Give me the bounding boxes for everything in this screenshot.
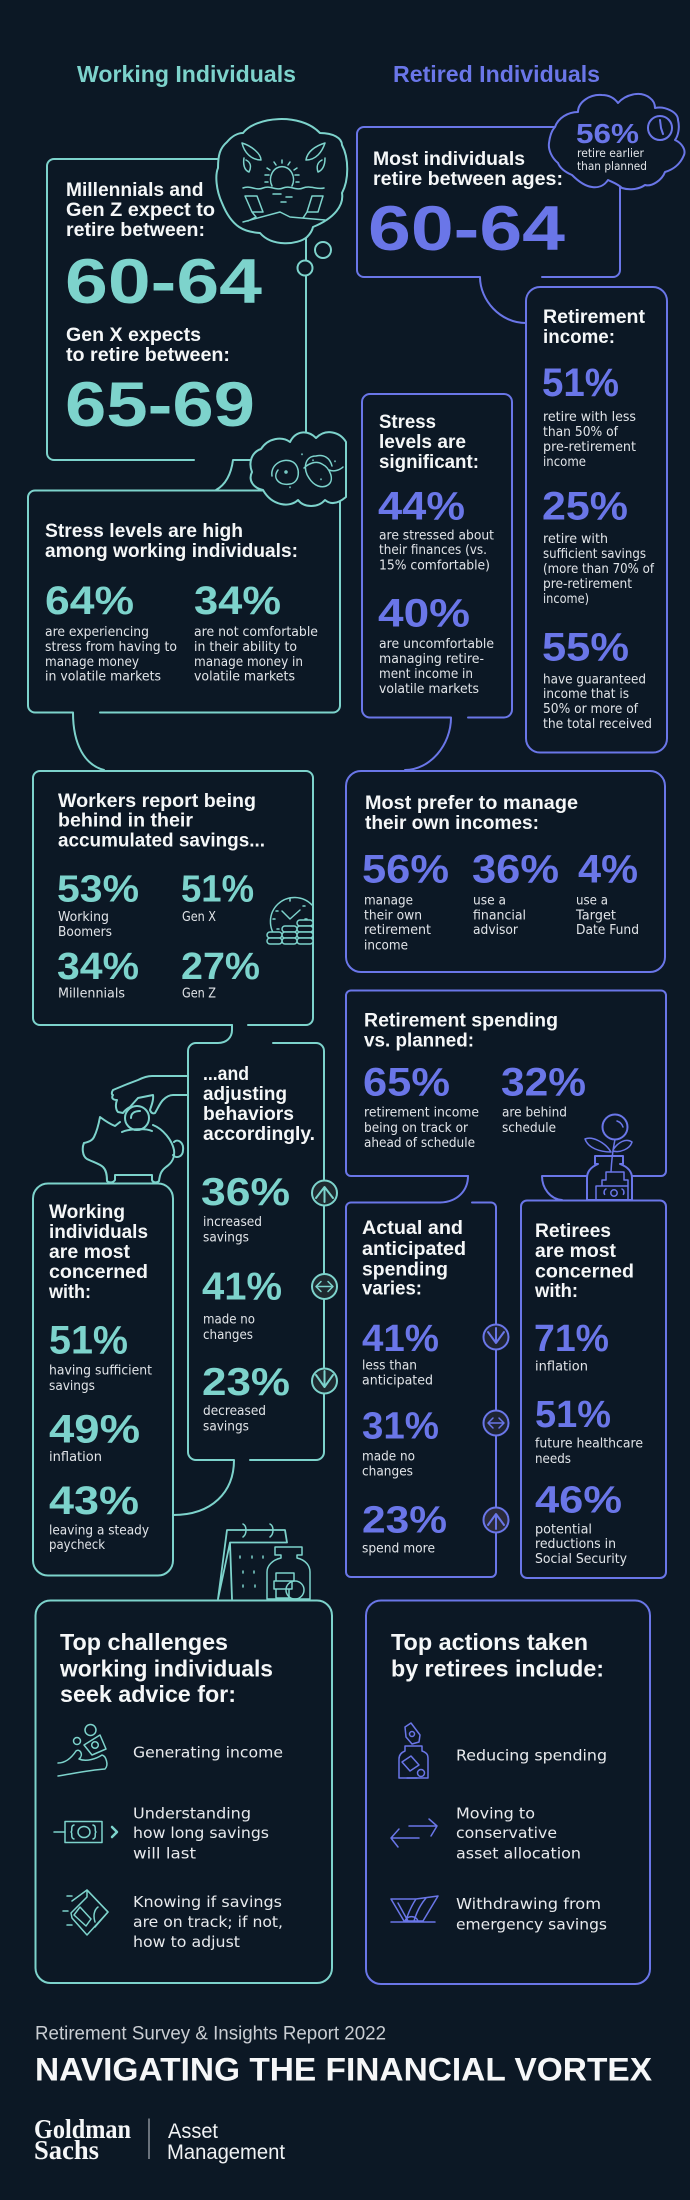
heading: top actions: Top actions taken (391, 1629, 588, 1655)
stat: 25%: retire with (543, 531, 608, 547)
stat: 36% advisor: 36% (472, 848, 559, 892)
stat: 44%: their finances (vs. (379, 542, 487, 558)
stat: 34%: 34% (194, 579, 281, 623)
stat: 44%: are stressed about (379, 528, 494, 544)
heading: spending varies: spending (362, 1258, 448, 1280)
text: moving to conservative: conservative (456, 1824, 557, 1842)
stat: 36% increased (201, 1171, 290, 1246)
text: understanding how long savings: will last (133, 1844, 196, 1862)
heading: spending varies (362, 1217, 466, 1300)
logo: Goldman Sachs Asset Management: Goldman (34, 2114, 131, 2144)
icon: scribble cloud (250, 432, 346, 506)
stat: 40%: managing retire- (379, 651, 484, 667)
panel: working stress levels (28, 490, 340, 770)
stat: 53%: 53% (57, 868, 139, 910)
stat: 71% inflation: 71% (534, 1318, 609, 1360)
panel: retirement income (526, 287, 667, 752)
logo: Goldman Sachs Asset Management: Sachs (34, 2135, 99, 2165)
stat: 64%: are experiencing (45, 624, 149, 640)
stat: 71% inflation: inflation (535, 1358, 588, 1374)
heading: stress significant: Stress (379, 411, 436, 433)
heading: workers report: accumulated savings... (58, 830, 265, 852)
stat: 65% on track: 65% (363, 1060, 450, 1104)
stat: 65% on track: retirement income (364, 1104, 479, 1120)
panel: retired stress (362, 394, 512, 770)
panel: workers behind in savings (33, 771, 313, 1025)
stat: 25%: (more than 70% of (543, 561, 655, 577)
stat: 51% savings: 51% (49, 1318, 128, 1362)
heading: stress levels high (45, 520, 298, 562)
icon: down arrow (484, 1324, 508, 1350)
stat: 51%: income (543, 454, 586, 470)
panel: actual and anticipated spending (346, 1176, 508, 1577)
stat: 4% target date: 4% (578, 848, 638, 892)
stat: 25%: income) (543, 591, 589, 607)
heading: most concerned (48, 1201, 148, 1303)
stat: 31% no changes: made no (362, 1448, 415, 1464)
heading: stress significant (379, 411, 479, 473)
stat: 51% savings: having sufficient (49, 1362, 152, 1378)
text: Gen X expects: Gen X expects (66, 324, 201, 346)
logo: Goldman Sachs Asset Management: Asset (168, 2120, 218, 2143)
heading: retirees concerned: concerned (535, 1260, 634, 1282)
stat: 36% increased: increased (203, 1214, 262, 1230)
stat: 51%: than 50% of (543, 424, 619, 440)
number: 65-69: 65-69 (65, 370, 255, 440)
icon: bill with arrow (54, 1822, 117, 1842)
heading: stress significant: significant: (379, 451, 479, 473)
heading: prefer to manage: their own incomes: (365, 812, 539, 834)
stat: 43% paycheck: leaving a steady (49, 1522, 149, 1538)
stat: 51% healthcare: needs (535, 1451, 571, 1467)
text: retire earlier than planned (577, 146, 647, 173)
stat: 46% social security: potential (535, 1522, 592, 1538)
icon: hand with money (58, 1724, 107, 1776)
text: Most individuals: Most individuals (373, 148, 525, 170)
stat: 44%: 15% comfortable) (379, 558, 490, 574)
stat: 34%: manage money in (194, 654, 303, 670)
icon: calendar and jar (218, 1524, 310, 1599)
panel: adjusting behaviors (173, 1025, 337, 1515)
stat: 25% (542, 484, 655, 607)
logo: Goldman Sachs Asset Management: Management (167, 2141, 285, 2164)
stat: 44% (378, 484, 494, 574)
heading: adjusting behaviors: ...and (203, 1063, 249, 1085)
stat: 25%: pre-retirement (543, 576, 632, 592)
stat: 36% advisor: advisor (473, 922, 518, 938)
stat: 51% savings (49, 1318, 152, 1394)
stat: 56% manage: 56% (362, 848, 449, 892)
icon: sideways arrow (312, 1274, 337, 1299)
icon: clock (648, 116, 672, 140)
stat: 40%: are uncomfortable (379, 636, 494, 652)
stat: 55%: income that is (543, 686, 629, 702)
heading: workers report: Workers report being (58, 790, 256, 812)
stat: 41% less: 41% (362, 1318, 439, 1360)
stat: 36% increased: 36% (201, 1171, 290, 1214)
text: retire earlier than planned: retire earlier (577, 146, 644, 160)
stat: 34% Millennials: Millennials (58, 986, 125, 1002)
stat: 31% no changes: 31% (362, 1406, 439, 1448)
heading: top actions: by retirees include: (391, 1656, 604, 1682)
stat: 36% increased: savings (203, 1230, 249, 1246)
icon: hand with coin and piggy bank (83, 1076, 188, 1182)
stat: 51%: retire with less (543, 409, 636, 425)
stat: 56%: 56% (576, 118, 639, 149)
heading: top actions (391, 1629, 604, 1682)
stat: 51%: pre-retirement (543, 439, 636, 455)
heading: retirement income: income: (543, 326, 615, 348)
panel: working retirement age (47, 159, 306, 490)
stat: 31% no changes (362, 1406, 439, 1480)
stat: 32% behind: 32% (501, 1060, 586, 1104)
icon: sideways arrow (484, 1410, 508, 1436)
text: withdrawing: Withdrawing from (456, 1895, 601, 1913)
stat: 56% manage: manage (364, 892, 413, 908)
stat: 64% (45, 579, 177, 684)
stat: 56% manage: their own (364, 908, 422, 924)
heading: retirement income (543, 306, 645, 348)
text: Millennials and Gen Z: Millennials and (66, 179, 204, 201)
text: Most individuals (373, 148, 563, 190)
stat: 40%: volatile markets (379, 681, 479, 697)
icon: down arrow (312, 1368, 337, 1394)
heading: most concerned: Working (49, 1201, 125, 1223)
stat: 23% decreased: savings (203, 1418, 249, 1434)
heading: adjusting behaviors: adjusting (203, 1083, 287, 1105)
stat: 46% social security: Social Security (535, 1551, 627, 1567)
text: moving to conservative: asset allocation (456, 1844, 581, 1862)
stat: 41% no change: 41% (202, 1266, 282, 1308)
heading: most concerned: are most (49, 1241, 130, 1263)
heading: spending vs planned (364, 1010, 558, 1052)
stat: 23% more (362, 1500, 447, 1556)
heading: retirees concerned (534, 1220, 634, 1302)
stat: 43% paycheck (49, 1479, 149, 1553)
stat: 41% no change: made no (203, 1312, 255, 1328)
text: understanding how long savings: how long savings (133, 1824, 269, 1842)
stat: 36% advisor (472, 848, 559, 938)
heading: prefer to manage (365, 792, 578, 834)
stat: 32% behind: schedule (502, 1120, 556, 1136)
heading: spending vs planned: vs. planned: (364, 1030, 474, 1052)
stat: 34%: in their ability to (194, 639, 297, 655)
icon: jar with tag (399, 1723, 428, 1778)
stat: 23% more: 23% (362, 1500, 447, 1542)
heading: top challenges: seek advice for: (60, 1681, 236, 1707)
text: Most individuals: retire between ages: (373, 168, 563, 190)
heading: stress levels high: Stress levels are high (45, 520, 243, 542)
heading: adjusting behaviors: accordingly. (203, 1123, 315, 1145)
stat: 32% behind: are behind (502, 1104, 567, 1120)
stat: 43% paycheck: 43% (49, 1479, 139, 1523)
icon: exchange arrows (391, 1819, 437, 1847)
text: reducing spending: Reducing spending (456, 1746, 607, 1764)
stat: 41% less: less than (362, 1358, 417, 1374)
number: 60-64: 60-64 (65, 247, 262, 317)
stat: 4% target date: Date Fund (576, 922, 639, 938)
callout cloud: 56% retire earlier (549, 94, 685, 189)
stat: 51% healthcare: future healthcare (535, 1436, 643, 1452)
icon: up arrow (312, 1180, 337, 1206)
text: knowing if savings: Knowing if savings (133, 1893, 282, 1911)
logo: Goldman Sachs Asset Management (34, 2114, 285, 2165)
text: knowing if savings: are on track; if not, (133, 1913, 283, 1931)
stat: 4% target date: use a (576, 892, 608, 908)
heading: workers report: behind in their (58, 810, 193, 832)
number: 60-64 retired: 60-64 (368, 194, 565, 264)
footer: report subtitle: Retirement Survey & Insights Report 2022 (35, 2024, 386, 2044)
stat: 34%: volatile markets (194, 668, 295, 684)
stat: 34%: are not comfortable (194, 624, 318, 640)
stat: 51% healthcare (535, 1394, 643, 1467)
stat: 56% manage (362, 848, 449, 954)
text: moving to conservative (456, 1804, 581, 1862)
stat: 34% (194, 579, 318, 684)
stat: 53% (57, 868, 139, 940)
heading: spending varies: varies: (362, 1278, 422, 1300)
stat: 55%: 50% or more of (543, 701, 639, 717)
panel: retired ages (357, 127, 620, 323)
text: Gen X expects (66, 324, 230, 366)
heading: spending varies: Actual and (362, 1217, 463, 1239)
heading: top challenges: working individuals (59, 1656, 273, 1682)
text: retire earlier than planned: than planned (577, 159, 647, 173)
stat: 65% on track (363, 1060, 479, 1151)
stat: 36% advisor: financial (473, 908, 526, 924)
heading: retirement income: Retirement (543, 306, 645, 328)
stat: 46% social security (535, 1480, 627, 1567)
icon: flying bills (63, 1890, 108, 1935)
heading: top challenges (59, 1629, 273, 1707)
text: generating income: Generating income (133, 1744, 283, 1762)
stat: 41% no change: changes (203, 1327, 253, 1343)
panel: retirement spending (346, 990, 666, 1200)
stat: 41% no change (202, 1266, 282, 1343)
stat: 55%: the total received (543, 716, 652, 732)
stat: 64%: in volatile markets (45, 668, 161, 684)
heading: top challenges: Top challenges (60, 1629, 228, 1655)
panel: top challenges (36, 1600, 332, 1983)
text: withdrawing (456, 1895, 607, 1934)
text: understanding how long savings (133, 1804, 269, 1862)
stat: 34% Millennials: 34% (57, 946, 139, 988)
text: Gen X expects: to retire between: (66, 344, 230, 366)
stat: 44%: 44% (378, 484, 465, 528)
heading: adjusting behaviors: behaviors (203, 1103, 294, 1125)
stat: 36% advisor: use a (473, 892, 506, 908)
icon: clock and coins (267, 897, 313, 944)
stat: 49% inflation (49, 1408, 140, 1465)
panel: retirees concerned (521, 1200, 666, 1578)
stat: 51%: 51% (542, 361, 619, 405)
heading: spending varies: anticipated (362, 1238, 466, 1260)
stat: 51% healthcare: 51% (535, 1394, 611, 1436)
text: Millennials and Gen Z (66, 179, 215, 241)
text: knowing if savings (133, 1893, 283, 1951)
heading: retirees concerned: are most (535, 1240, 616, 1262)
stat: 55%: 55% (542, 626, 629, 670)
stat: 23% decreased: decreased (203, 1403, 266, 1419)
stat: 41% less: anticipated (362, 1372, 433, 1388)
stat: 25%: sufficient savings (543, 546, 646, 562)
stat: 56% manage: retirement (364, 922, 431, 938)
stat: 31% no changes: changes (362, 1464, 413, 1480)
icon: plant in jar (585, 1114, 632, 1200)
stat: 27% Gen Z: 27% (181, 946, 260, 988)
stat: 49% inflation: inflation (49, 1449, 102, 1465)
heading: retirees concerned: Retirees (535, 1220, 611, 1242)
heading: stress significant: levels are (379, 431, 466, 453)
heading: most concerned: individuals (49, 1221, 148, 1243)
stat: 55%: have guaranteed (543, 672, 646, 688)
stat: 51% (542, 361, 636, 470)
panel: top actions (366, 1600, 650, 1984)
stat: 64%: 64% (45, 579, 134, 623)
text: knowing if savings: how to adjust (133, 1933, 240, 1951)
stat: 55% (542, 626, 652, 732)
text: Millennials and Gen Z: Gen Z expect to (66, 199, 215, 221)
footer: main title: NAVIGATING THE FINANCIAL VORTEX (35, 2052, 653, 2088)
heading: spending vs planned: Retirement spending (364, 1010, 558, 1032)
stat: 51% savings: savings (49, 1378, 95, 1394)
heading: workers report (58, 790, 265, 852)
stat: 64%: manage money (45, 654, 139, 670)
icon: thought cloud with beach (216, 119, 347, 276)
stat: 40%: ment income in (379, 666, 473, 682)
text: Millennials and Gen Z: retire between: (66, 219, 205, 241)
panel: working individuals concerned (33, 1184, 173, 1576)
stat: 43% paycheck: paycheck (49, 1537, 105, 1553)
heading: stress levels high: among working individuals: (45, 540, 298, 562)
stat: 40% (378, 592, 494, 697)
stat: 53%: Working (58, 909, 109, 925)
stat: 32% behind (501, 1060, 586, 1136)
stat: 64%: stress from having to (45, 639, 177, 655)
heading: most concerned: concerned (49, 1261, 148, 1283)
stat: 23% decreased: 23% (202, 1361, 290, 1404)
panel: most prefer (346, 771, 665, 972)
text: moving to conservative: Moving to (456, 1804, 535, 1822)
heading: most concerned: with: (48, 1281, 91, 1303)
stat: 23% decreased (202, 1361, 290, 1434)
stat: 46% social security: reductions in (535, 1536, 616, 1552)
stat: 40%: 40% (378, 592, 470, 636)
stat: 53%: Boomers (58, 924, 112, 940)
stat: 56% manage: income (364, 938, 408, 954)
stat: 4% target date (575, 848, 639, 938)
stat: 41% less (362, 1318, 439, 1388)
icon: withdraw funnel (391, 1896, 438, 1922)
stat: 23% more: spend more (362, 1540, 435, 1556)
text: understanding how long savings: Understanding (133, 1804, 251, 1822)
stat: 4% target date: Target (575, 908, 616, 924)
stat: 49% inflation: 49% (49, 1408, 140, 1452)
stat: 51% Gen X: Gen X (182, 909, 216, 925)
heading: retirees concerned: with: (534, 1280, 578, 1302)
stat: 51% Gen X: 51% (181, 868, 254, 910)
icon: up arrow (484, 1508, 508, 1532)
heading: Retired Individuals: Retired Individuals (393, 61, 600, 87)
heading: adjusting behaviors (203, 1063, 315, 1145)
heading: Working Individuals: Working Individuals (77, 61, 296, 87)
stat: 65% on track: ahead of schedule (364, 1135, 475, 1151)
stat: 27% Gen Z: Gen Z (182, 986, 216, 1002)
heading: prefer to manage: Most prefer to manage (365, 792, 578, 814)
text: withdrawing: emergency savings (456, 1916, 607, 1934)
stat: 25%: 25% (542, 484, 628, 528)
stat: 65% on track: being on track or (364, 1120, 468, 1136)
stat: 46% social security: 46% (535, 1480, 622, 1522)
